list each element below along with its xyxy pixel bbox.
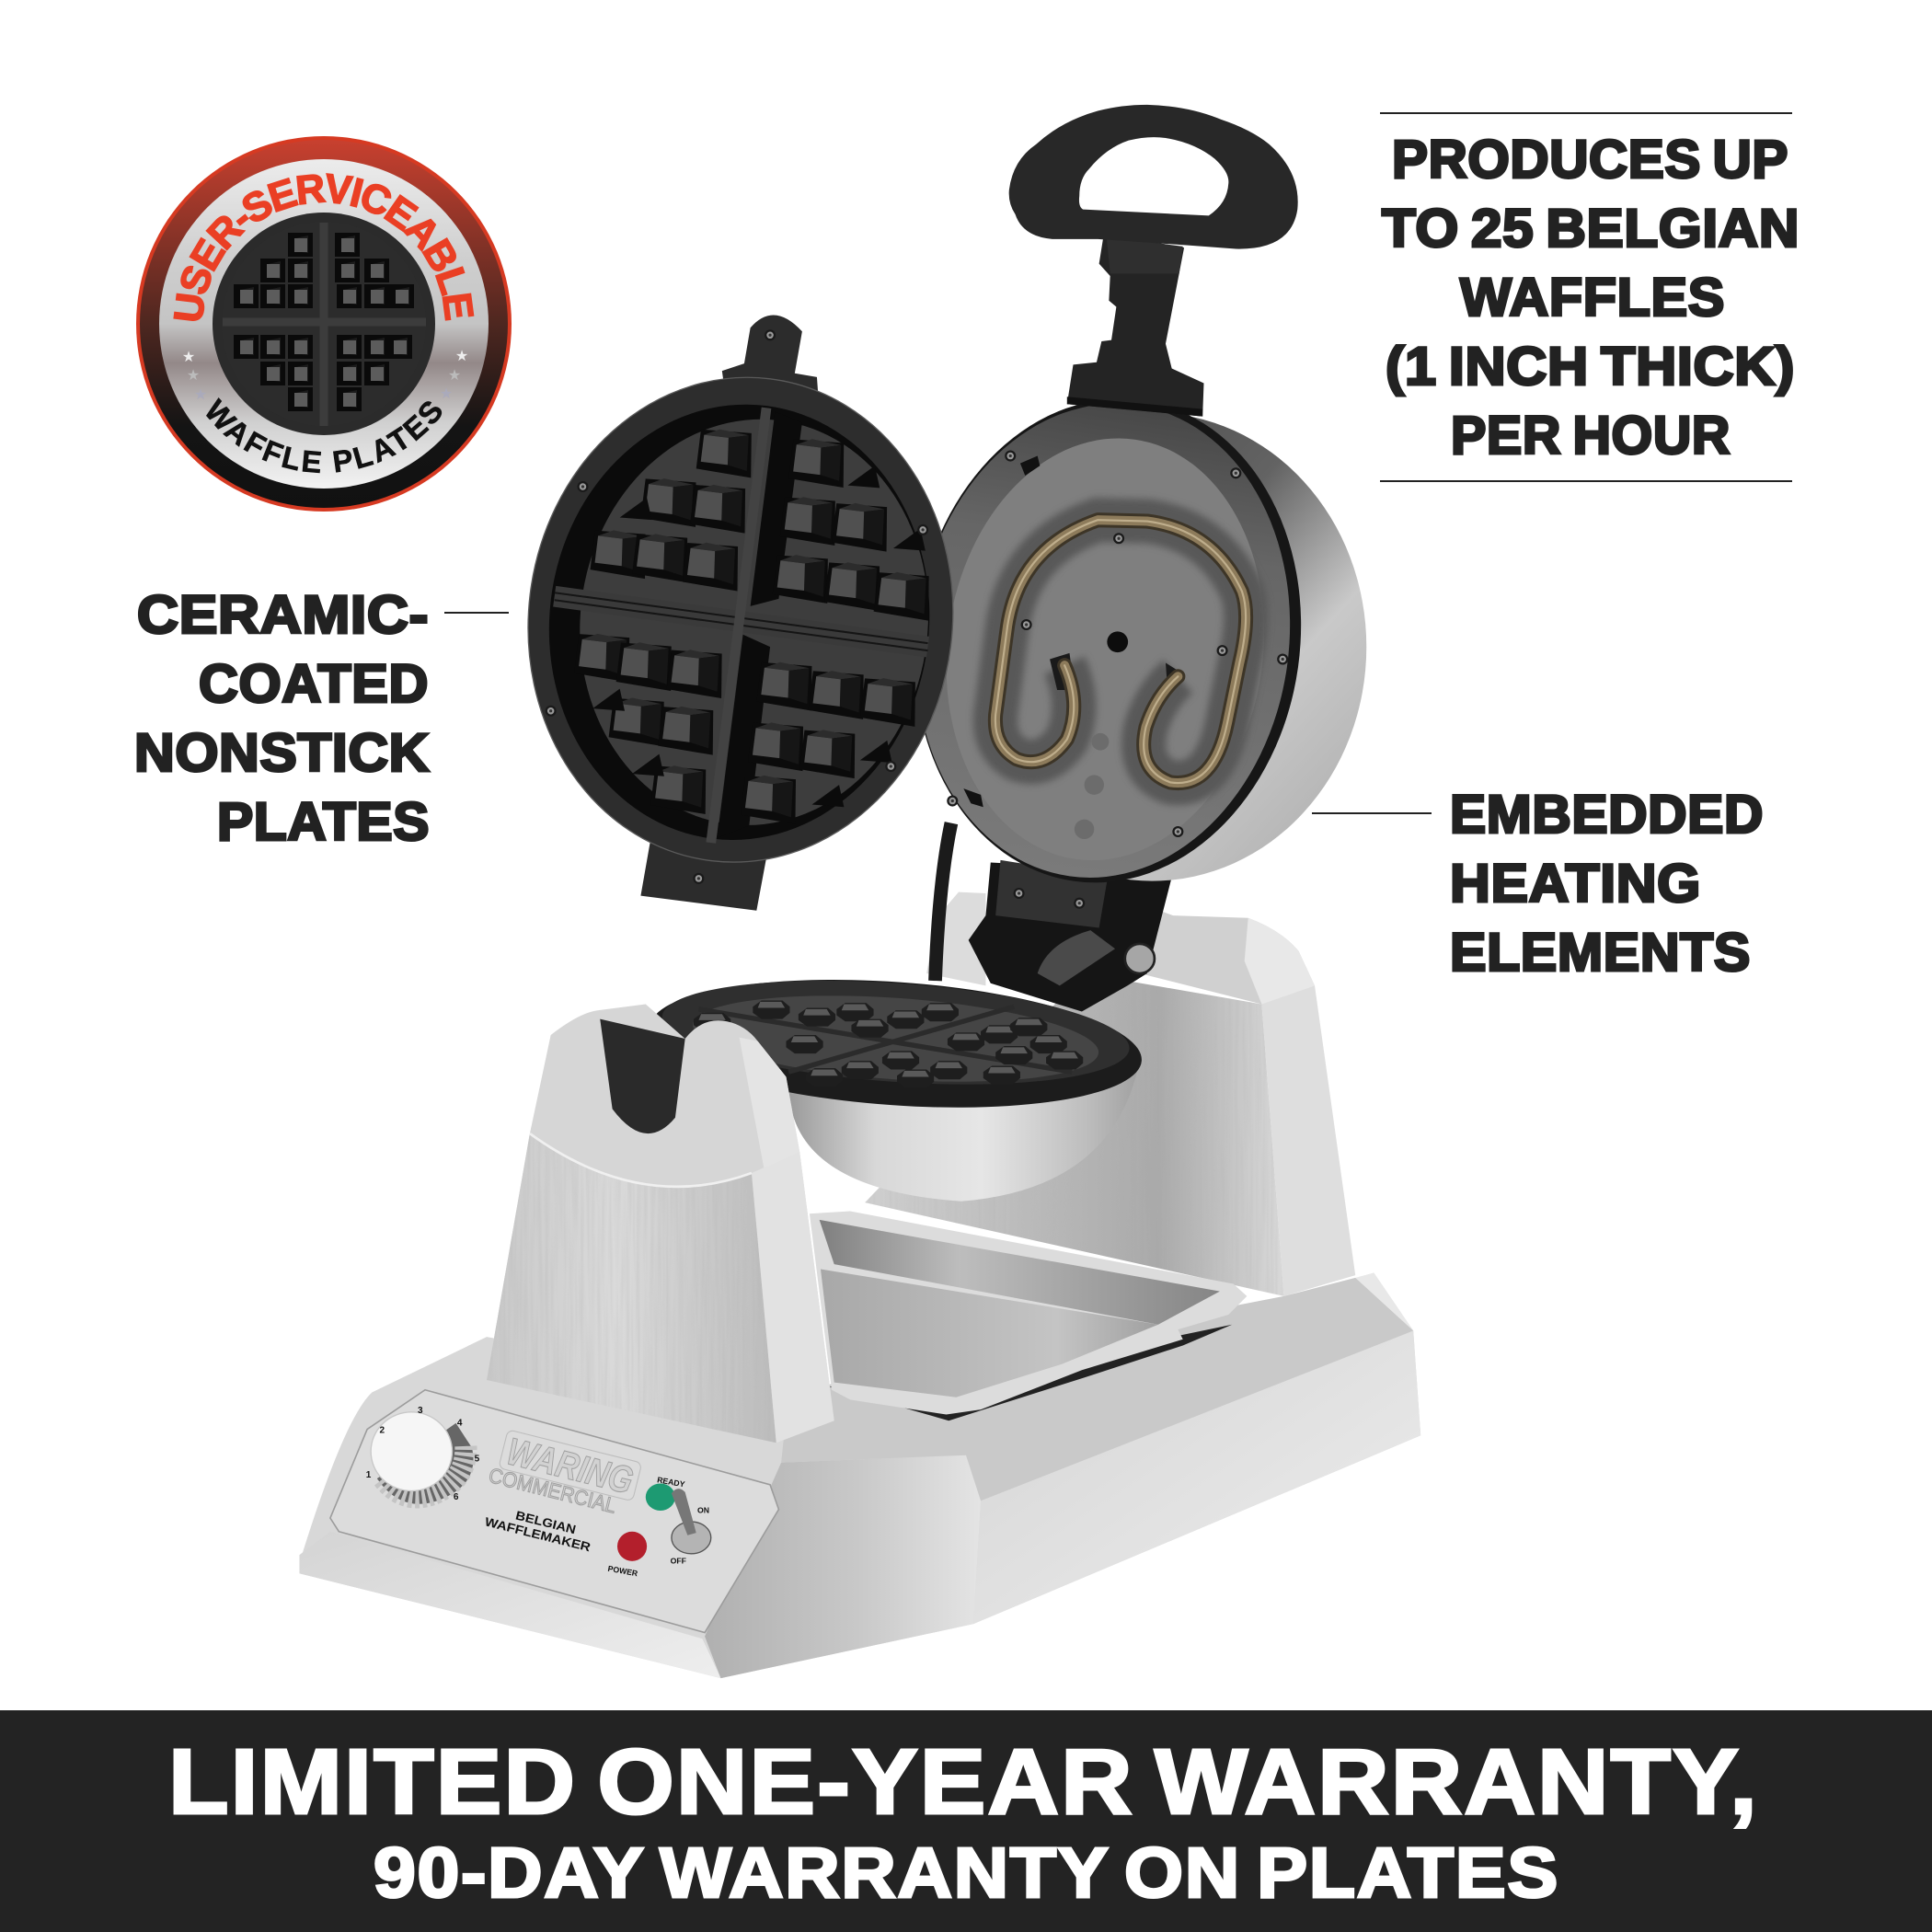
badge stars: ★ xyxy=(182,348,195,365)
callout: production rate: WAFFLES xyxy=(1460,268,1725,328)
callout: ceramic-coated nonstick plates: CERAMIC- xyxy=(137,585,429,645)
callout: production rate: TO 25 BELGIAN xyxy=(1382,199,1800,259)
toggle switch xyxy=(671,1489,711,1566)
control panel xyxy=(330,1390,778,1633)
warranty banner xyxy=(0,1710,1932,1932)
model name xyxy=(483,1501,595,1554)
dial numbers: 2 xyxy=(380,1426,385,1436)
waffle grid dividers xyxy=(555,408,927,843)
open waffle plate xyxy=(500,315,981,911)
heating element tube xyxy=(995,520,1246,783)
model name: WAFFLEMAKER xyxy=(483,1514,592,1554)
badge stars xyxy=(182,347,468,403)
lower plate waffle blocks xyxy=(690,984,1101,1094)
ready lamp xyxy=(646,1475,685,1511)
dial numbers: 5 xyxy=(475,1454,480,1464)
callout: embedded heating elements: EMBEDDED xyxy=(1450,785,1764,845)
callout: ceramic-coated nonstick plates: COATED xyxy=(199,654,429,714)
model name: BELGIAN xyxy=(514,1508,578,1536)
badge stars: ★ xyxy=(187,366,200,384)
rear right support pillar xyxy=(865,887,1355,1296)
ready lamp: READY xyxy=(656,1475,685,1489)
badge black curved subtitle: WAFFLE PLATES xyxy=(206,397,442,473)
badge stars: ★ xyxy=(440,385,453,402)
badge: user-serviceable waffle plates xyxy=(136,136,512,512)
waffle maker product photo xyxy=(299,105,1420,1678)
dial numbers: 1 xyxy=(366,1470,372,1480)
callout: embedded heating elements xyxy=(1312,785,1764,983)
dial numbers: 4 xyxy=(457,1419,463,1429)
power lamp: POWER xyxy=(607,1564,639,1578)
warranty banner: LIMITED ONE-YEAR WARRANTY, xyxy=(168,1731,1759,1834)
badge waffle cross xyxy=(223,223,426,426)
base housing xyxy=(299,1272,1420,1678)
Waring Commercial logo xyxy=(487,1426,642,1522)
front left support pillar xyxy=(487,1005,834,1443)
Waring Commercial logo: WARING xyxy=(502,1429,638,1502)
warranty banner: 90-DAY WARRANTY ON PLATES xyxy=(374,1834,1559,1913)
hinge assembly and power cord xyxy=(936,823,1173,1012)
temperature dial xyxy=(371,1412,474,1504)
plate screws xyxy=(546,329,928,884)
waffle blocks xyxy=(574,427,934,824)
dial numbers: 6 xyxy=(454,1492,459,1502)
badge waffle blocks xyxy=(234,233,414,411)
callout: ceramic-coated nonstick plates: PLATES xyxy=(217,792,430,852)
callout: production rate: (1 INCH THICK) xyxy=(1386,337,1795,397)
callout: embedded heating elements: ELEMENTS xyxy=(1450,923,1751,983)
drip tray xyxy=(810,1212,1247,1420)
lower waffle pan xyxy=(646,965,1146,1202)
callout: production rate xyxy=(1380,113,1800,481)
toggle switch: ON xyxy=(697,1506,709,1515)
plate mounting tabs xyxy=(640,315,818,911)
pillar notch xyxy=(600,1019,685,1133)
dial numbers xyxy=(366,1406,480,1502)
toggle switch: OFF xyxy=(671,1557,686,1566)
callout: embedded heating elements: HEATING xyxy=(1450,854,1701,914)
callout: production rate: PRODUCES UP xyxy=(1392,130,1788,190)
power lamp xyxy=(607,1532,647,1578)
callout: ceramic-coated nonstick plates xyxy=(134,585,509,852)
callout: ceramic-coated nonstick plates: NONSTICK xyxy=(134,723,430,783)
badge stars: ★ xyxy=(455,347,468,364)
badge stars: ★ xyxy=(448,366,461,384)
badge stars: ★ xyxy=(194,385,207,403)
upper lid silver bowl xyxy=(937,413,1366,881)
recess around heating element xyxy=(995,520,1246,783)
dial numbers: 3 xyxy=(418,1406,423,1416)
badge red curved title: USER-SERVICEABLE xyxy=(173,173,475,321)
Waring Commercial logo: COMMERCIAL xyxy=(487,1463,619,1518)
upper lid inner face xyxy=(883,374,1332,908)
upper handle xyxy=(1009,105,1298,417)
callout: production rate: PER HOUR xyxy=(1451,406,1731,466)
